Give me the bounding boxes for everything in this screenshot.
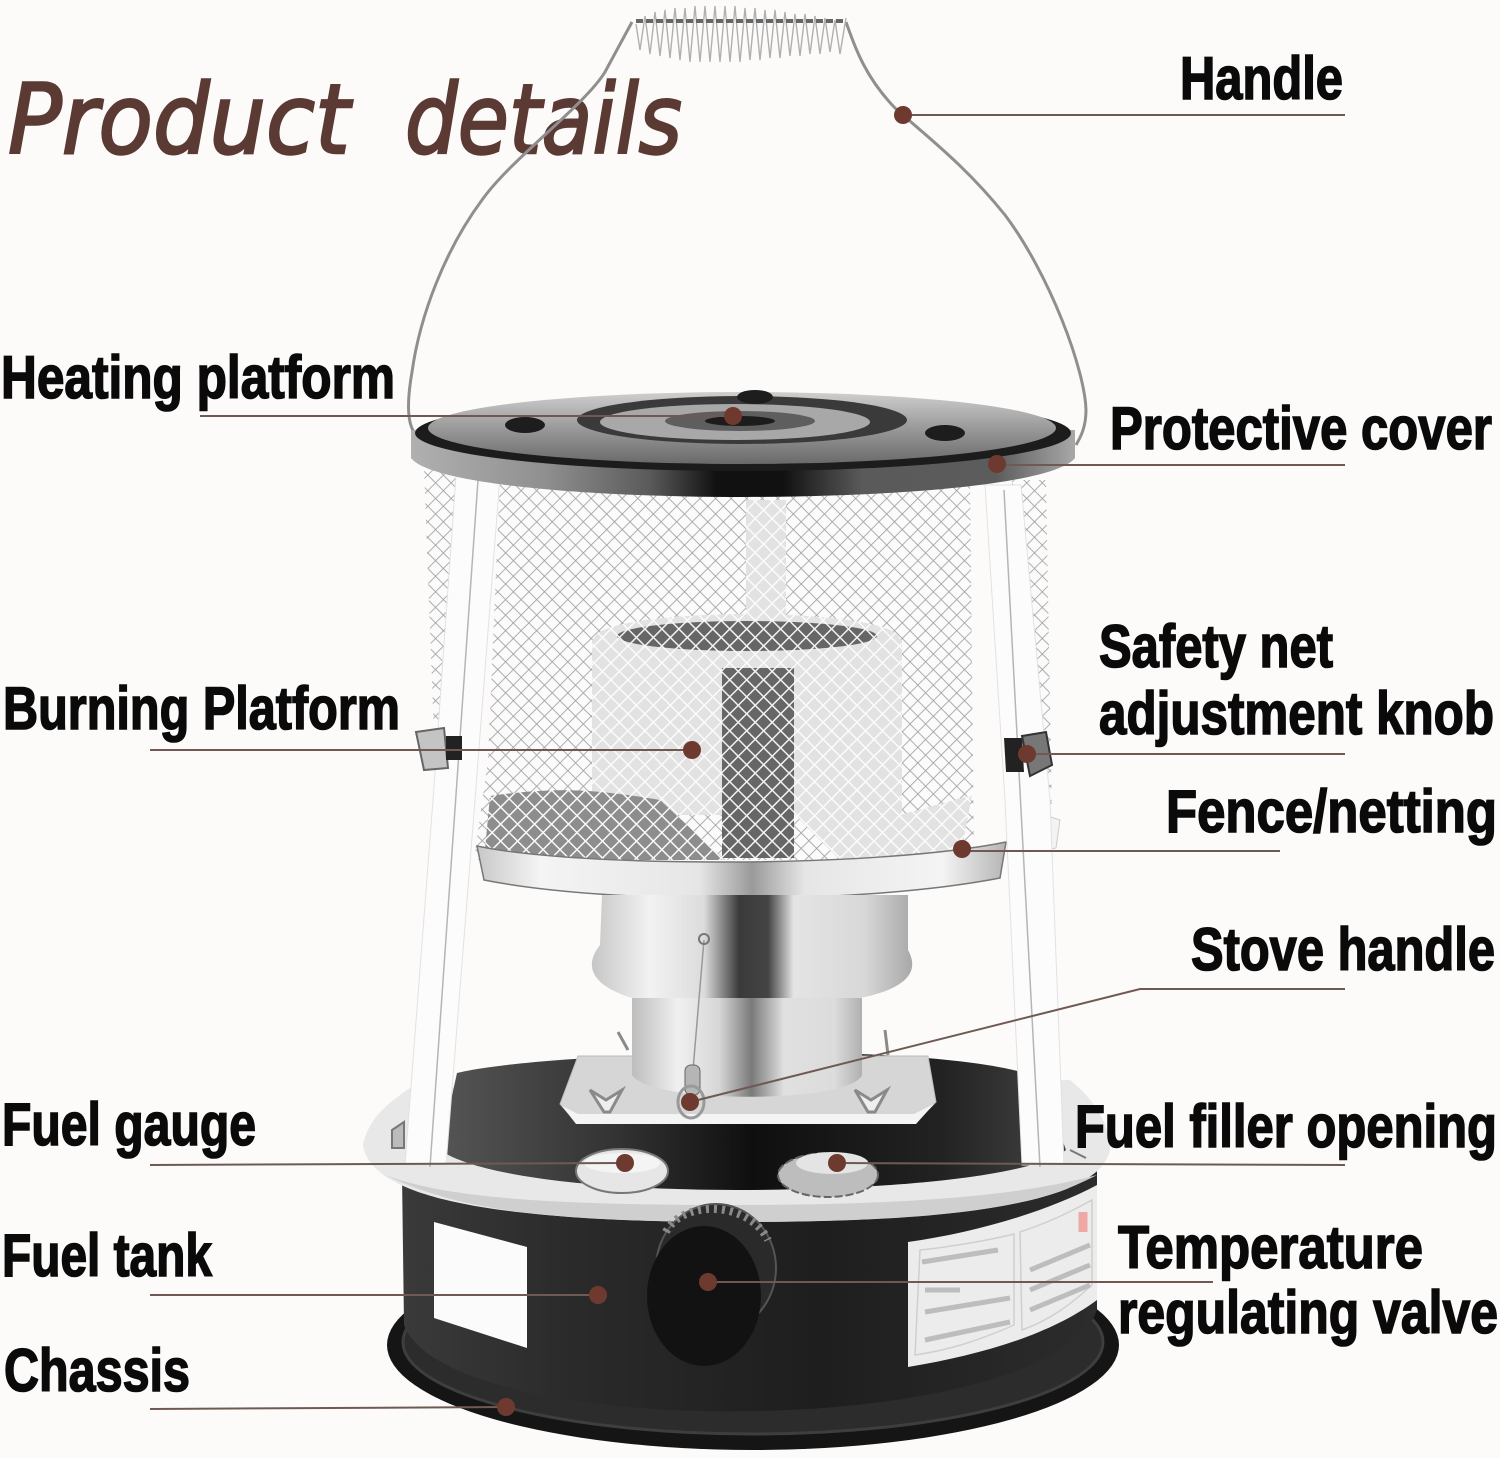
- lid: [411, 390, 1075, 497]
- fuel tank body: [402, 1170, 1097, 1411]
- fuel gauge cap: [576, 1149, 668, 1193]
- burner base plate: [560, 1056, 936, 1124]
- callout: temperature regulating valve: [699, 1214, 1498, 1346]
- callout: heating platform: [1, 344, 742, 425]
- carrying handle with spring: [408, 6, 1086, 445]
- fence ring: [477, 812, 1060, 899]
- callout: fuel gauge: Fuel gauge: [2, 1091, 256, 1158]
- callout: safety net adjustment knob: [1018, 613, 1494, 763]
- callout: handle: [894, 45, 1345, 124]
- callout: fence/netting: [953, 778, 1497, 858]
- callout: safety net adjustment knob: Safety net: [1099, 613, 1333, 680]
- callout: handle: Handle: [1180, 45, 1343, 112]
- callout: temperature regulating valve: Temperature: [1118, 1214, 1423, 1281]
- callout: burning platform: Burning Platform: [3, 675, 400, 742]
- callout: chassis: [4, 1337, 515, 1416]
- title: details: [405, 64, 682, 176]
- fuel filler cap: [778, 1152, 878, 1197]
- white support legs: [392, 476, 1086, 1167]
- callout: burning platform: [3, 675, 701, 759]
- chassis tray: [387, 1240, 1119, 1450]
- lower chimney: [632, 998, 862, 1097]
- upper chimney: [592, 895, 912, 998]
- heater illustration: [363, 6, 1119, 1450]
- right rating label: [908, 1185, 1097, 1367]
- callout: fuel gauge: [2, 1091, 634, 1172]
- callout: heating platform: Heating platform: [1, 344, 395, 411]
- callout: fuel filler opening: [828, 1093, 1497, 1172]
- callout: stove handle: [681, 916, 1495, 1111]
- callout: chassis: Chassis: [4, 1337, 190, 1404]
- callout: fuel tank: Fuel tank: [2, 1222, 212, 1289]
- temperature valve knob: [647, 1204, 776, 1366]
- title: Product: [8, 64, 353, 176]
- title: [8, 64, 682, 176]
- callout: fuel tank: [2, 1222, 607, 1304]
- rear mesh and side netting: [424, 468, 1052, 860]
- stove handle rod: [678, 934, 709, 1118]
- left white label: [434, 1222, 527, 1348]
- callout: protective cover: [988, 395, 1492, 473]
- wing nuts: [590, 1030, 888, 1112]
- burning platform: [484, 614, 972, 860]
- tank top with tray: [363, 934, 1110, 1222]
- adjustment knobs: [416, 728, 1052, 776]
